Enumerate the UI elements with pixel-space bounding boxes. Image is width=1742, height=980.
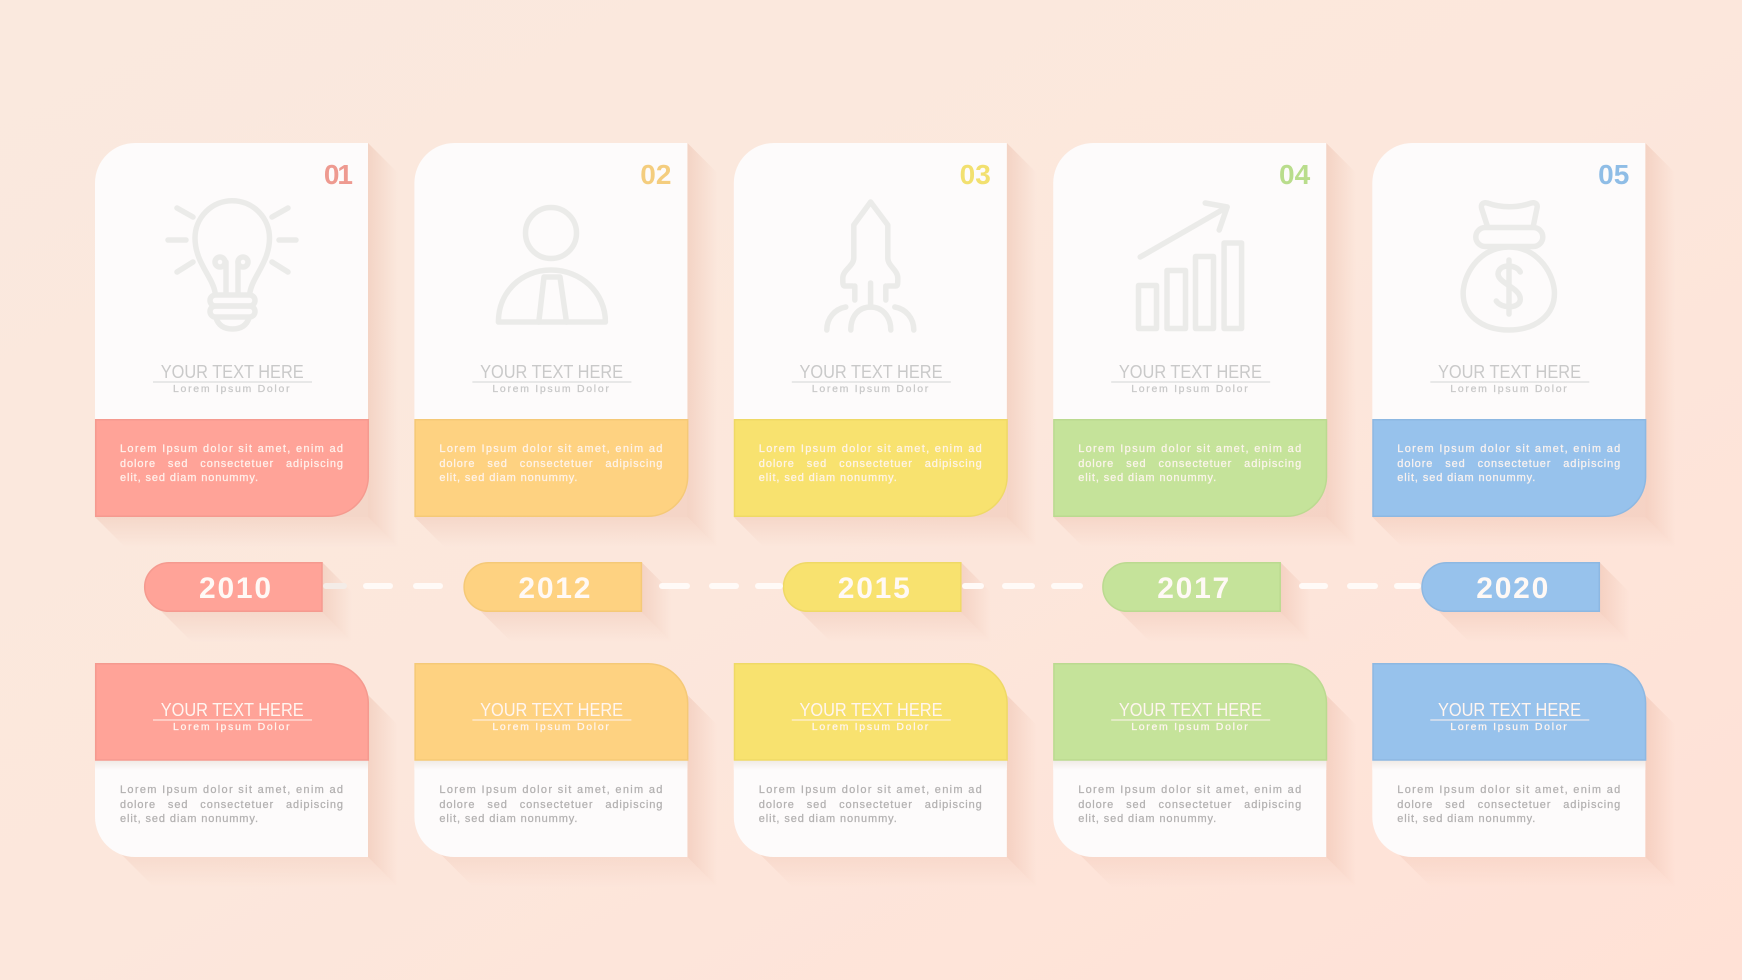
- icon: rocket: [827, 202, 914, 330]
- subheading: Lorem Ipsum Dolor: [1131, 383, 1249, 395]
- subheading: Lorem Ipsum Dolor: [1450, 383, 1568, 395]
- heading: YOUR TEXT HERE: [1119, 699, 1262, 720]
- year tag 2012: 2012: [518, 572, 590, 605]
- heading: YOUR TEXT HERE: [480, 361, 623, 382]
- description: elit, sed diam nonummy.: [759, 472, 897, 484]
- description: [120, 443, 343, 484]
- top card 02: [414, 143, 717, 547]
- column 1: 2010: [95, 143, 398, 887]
- description: [1397, 443, 1620, 484]
- description: Lorem Ipsum dolor sit amet, enim ad: [759, 443, 982, 455]
- heading: YOUR TEXT HERE: [1119, 361, 1262, 382]
- description: elit, sed diam nonummy.: [1078, 813, 1216, 825]
- description: dolore sed consectetuer adipiscing: [439, 458, 662, 470]
- description: dolore sed consectetuer adipiscing: [759, 458, 982, 470]
- subheading: Lorem Ipsum Dolor: [812, 383, 930, 395]
- description: Lorem Ipsum dolor sit amet, enim ad: [439, 784, 662, 796]
- description: dolore sed consectetuer adipiscing: [1397, 799, 1620, 811]
- heading: YOUR TEXT HERE: [161, 361, 304, 382]
- description: dolore sed consectetuer adipiscing: [1078, 458, 1301, 470]
- description: dolore sed consectetuer adipiscing: [759, 799, 982, 811]
- subheading: Lorem Ipsum Dolor: [173, 721, 291, 733]
- bottom card 1: [95, 664, 398, 887]
- description: [439, 784, 662, 825]
- icon: growth chart: [1138, 203, 1242, 328]
- bottom card 3: [734, 664, 1037, 887]
- description: elit, sed diam nonummy.: [1397, 813, 1535, 825]
- bottom card 4: [1053, 664, 1356, 887]
- number 03: 03: [960, 159, 991, 190]
- year tag 2010: [145, 562, 352, 642]
- description: Lorem Ipsum dolor sit amet, enim ad: [439, 443, 662, 455]
- description: [759, 443, 982, 484]
- top card 04: [1053, 143, 1356, 547]
- description: [1078, 784, 1301, 825]
- bottom card 2: [414, 664, 717, 887]
- description: Lorem Ipsum dolor sit amet, enim ad: [1078, 443, 1301, 455]
- description: elit, sed diam nonummy.: [120, 813, 258, 825]
- column 4: 2017: [1053, 143, 1356, 887]
- icon: business person: [498, 208, 605, 322]
- top card 03: [734, 143, 1037, 547]
- column 5: 2020: [1372, 143, 1675, 887]
- description: elit, sed diam nonummy.: [1397, 472, 1535, 484]
- description: [439, 443, 662, 484]
- description: [759, 784, 982, 825]
- description: dolore sed consectetuer adipiscing: [1078, 799, 1301, 811]
- description: [1078, 443, 1301, 484]
- timeline dashes: [323, 583, 1421, 589]
- year tag 2017: 2017: [1157, 572, 1229, 605]
- year tag 2015: [784, 562, 991, 642]
- description: dolore sed consectetuer adipiscing: [120, 458, 343, 470]
- description: Lorem Ipsum dolor sit amet, enim ad: [1397, 784, 1620, 796]
- subheading: Lorem Ipsum Dolor: [1131, 721, 1249, 733]
- number 05: 05: [1598, 159, 1629, 190]
- description: Lorem Ipsum dolor sit amet, enim ad: [120, 784, 343, 796]
- subheading: Lorem Ipsum Dolor: [492, 383, 610, 395]
- subheading: Lorem Ipsum Dolor: [173, 383, 291, 395]
- subheading: Lorem Ipsum Dolor: [1450, 721, 1568, 733]
- year tag 2012: [464, 562, 671, 642]
- description: Lorem Ipsum dolor sit amet, enim ad: [1397, 443, 1620, 455]
- year tag 2020: 2020: [1476, 572, 1548, 605]
- description: Lorem Ipsum dolor sit amet, enim ad: [1078, 784, 1301, 796]
- subheading: Lorem Ipsum Dolor: [492, 721, 610, 733]
- description: [120, 784, 343, 825]
- description: Lorem Ipsum dolor sit amet, enim ad: [759, 784, 982, 796]
- year tag 2020: [1422, 562, 1629, 642]
- top card 05: [1372, 143, 1675, 547]
- description: dolore sed consectetuer adipiscing: [439, 799, 662, 811]
- heading: YOUR TEXT HERE: [1438, 361, 1581, 382]
- description: elit, sed diam nonummy.: [1078, 472, 1216, 484]
- number 04: 04: [1279, 159, 1311, 190]
- bottom card 5: [1372, 664, 1675, 887]
- description: elit, sed diam nonummy.: [759, 813, 897, 825]
- number 02: 02: [640, 159, 671, 190]
- year tag 2010: 2010: [199, 572, 271, 605]
- heading: YOUR TEXT HERE: [799, 699, 942, 720]
- description: [1397, 784, 1620, 825]
- heading: YOUR TEXT HERE: [161, 699, 304, 720]
- year tag 2015: 2015: [838, 572, 910, 605]
- icon: light bulb: [168, 201, 296, 329]
- description: elit, sed diam nonummy.: [439, 472, 577, 484]
- subheading: Lorem Ipsum Dolor: [812, 721, 930, 733]
- description: elit, sed diam nonummy.: [120, 472, 258, 484]
- description: dolore sed consectetuer adipiscing: [120, 799, 343, 811]
- icon: money bag: [1463, 203, 1554, 330]
- heading: YOUR TEXT HERE: [1438, 699, 1581, 720]
- column 2: 2012: [414, 143, 717, 887]
- description: Lorem Ipsum dolor sit amet, enim ad: [120, 443, 343, 455]
- heading: YOUR TEXT HERE: [480, 699, 623, 720]
- description: dolore sed consectetuer adipiscing: [1397, 458, 1620, 470]
- heading: YOUR TEXT HERE: [799, 361, 942, 382]
- year tag 2017: [1103, 562, 1310, 642]
- description: elit, sed diam nonummy.: [439, 813, 577, 825]
- number 01: 01: [324, 159, 352, 190]
- column 3: 2015: [734, 143, 1037, 887]
- top card 01: [95, 143, 398, 547]
